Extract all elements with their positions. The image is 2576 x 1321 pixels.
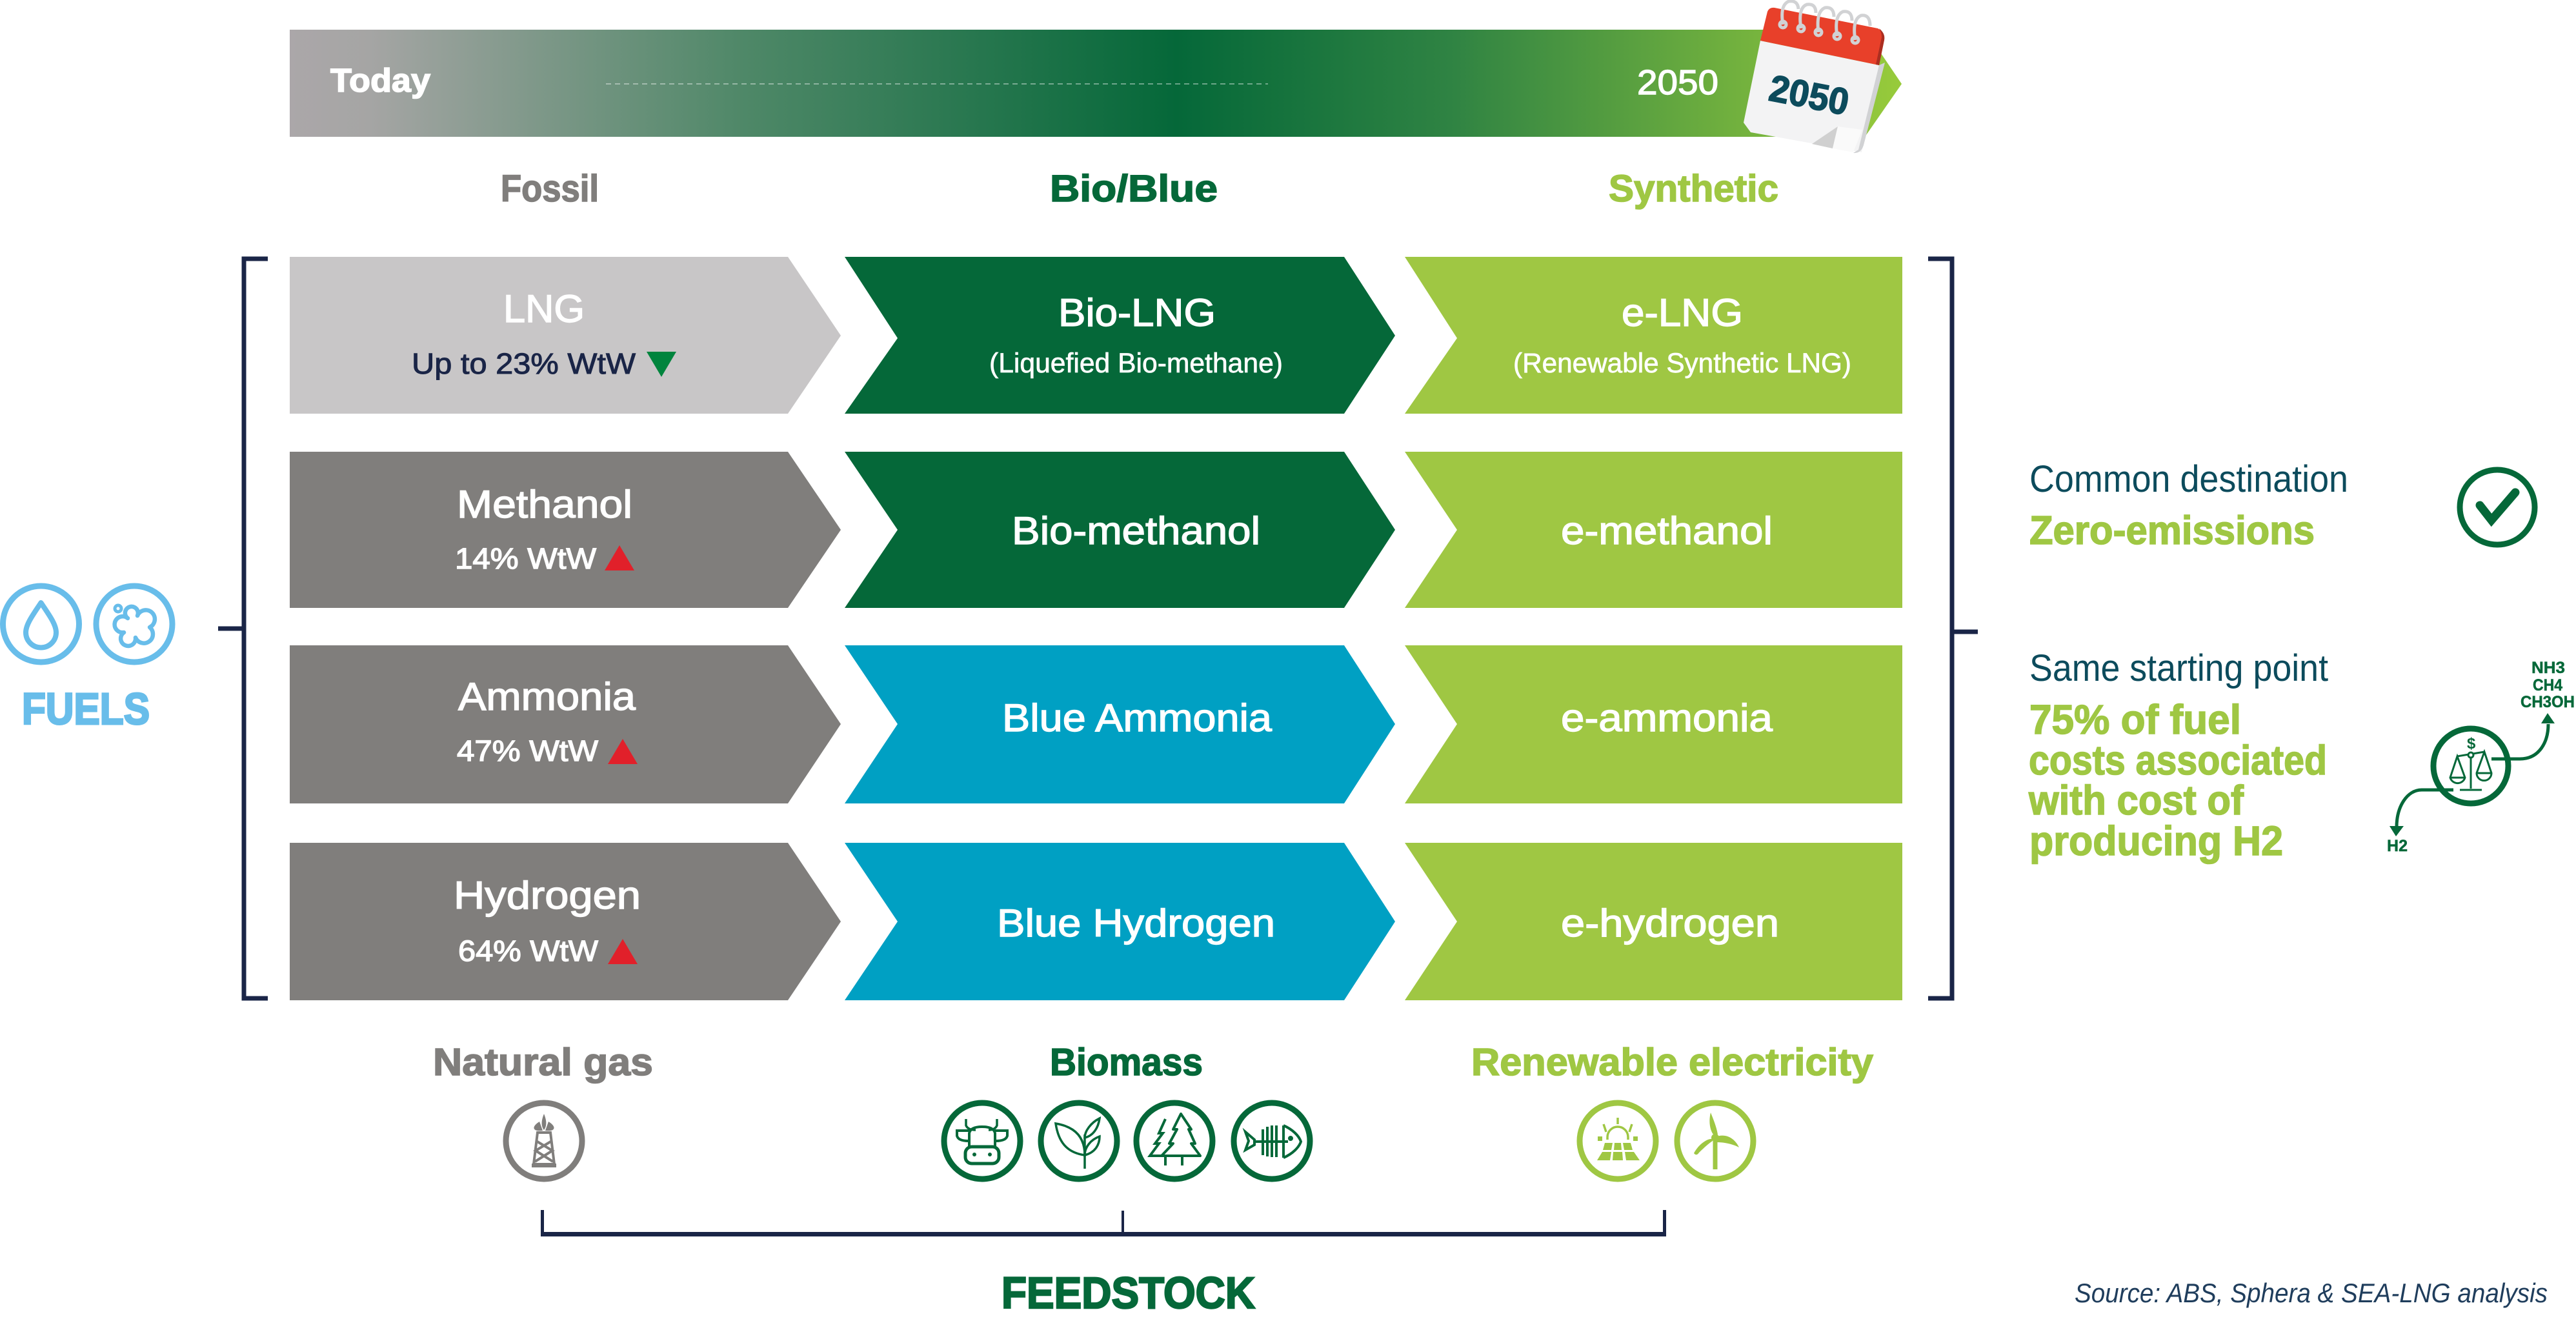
chevron: LNG: Up to 23% WtW [412,347,636,380]
bracket: feedstock [541,1210,1666,1235]
label: feedstock: FEEDSTOCK [1001,1268,1255,1318]
chevron: e-LNG: e-LNG [1622,291,1743,334]
heading: natural gas: Natural gas [433,1041,653,1084]
label: today: Today [330,62,431,99]
text: common destination: Common destination [2029,458,2348,500]
text: zero-emissions: Zero-emissions [2029,509,2315,553]
heading: fossil: Fossil [501,168,599,210]
chevron: e-ammonia: e-ammonia [1561,696,1773,740]
chevron: Hydrogen: 64% WtW [458,934,599,967]
chevron: e-methanol: e-methanol [1561,509,1773,552]
chevron: Methanol [290,452,841,608]
source note: Source: ABS, Sphera & SEA-LNG analysis [2075,1278,2548,1308]
heading: bio/blue: Bio/Blue [1050,168,1218,210]
label: output fuels: CH3OH [2521,693,2575,711]
chevron: Methanol: Methanol [457,483,632,526]
row: Ammonia [290,645,1902,803]
chevron: e-hydrogen [1405,843,1902,1000]
text: 75% of fuel costs: with cost of [2028,777,2244,823]
chevron: e-hydrogen: e-hydrogen [1561,902,1779,945]
icon: plant [1041,1103,1117,1179]
chevron: Blue Hydrogen [845,843,1395,1000]
label: fuels: FUELS [22,684,150,734]
chevron: e-LNG [1405,257,1902,414]
icon: cost scale with arrows: $ [2467,735,2476,752]
icon: cost scale with arrows [2387,659,2575,855]
icon: cow [944,1103,1020,1179]
chevron: Blue Hydrogen: Blue Hydrogen [997,902,1275,945]
chevron: e-LNG: (Renewable Synthetic LNG) [1513,348,1851,379]
text: 75% of fuel costs: 75% of fuel [2029,696,2241,743]
icon: calendar [1744,1,1885,153]
icon: gas cloud [96,586,172,662]
heading: renewable electricity: Renewable electricity [1471,1041,1873,1084]
icon: wind turbine [1677,1103,1753,1179]
label: output fuels: NH3 [2531,659,2565,677]
label: output fuels: CH4 [2533,676,2562,694]
text: common destination [2029,458,2348,553]
icon: gas rig [506,1103,582,1179]
chevron: Bio-methanol: Bio-methanol [1012,509,1260,552]
row: LNG [290,257,1902,414]
chevron: Hydrogen [290,843,841,1000]
chevron: Bio-LNG: (Liquefied Bio-methane) [989,348,1283,379]
heading: synthetic: Synthetic [1609,168,1778,210]
row: Hydrogen [290,843,1902,1000]
chevron: Ammonia [290,645,841,803]
text: same starting point: Same starting point [2029,647,2328,689]
text: 75% of fuel costs [2028,696,2327,864]
chevron: LNG [290,257,841,414]
bracket: fuels left [218,259,268,998]
chevron: Methanol: 14% WtW [455,542,597,575]
chevron: Bio-LNG: Bio-LNG [1058,291,1216,334]
chevron: Hydrogen: Hydrogen [454,874,641,917]
label: output fuels [2387,659,2575,855]
chevron: Ammonia: 47% WtW [457,734,599,767]
chevron: LNG: LNG [503,287,585,330]
icon: fish bone [1234,1103,1310,1179]
chevron: Ammonia: Ammonia [458,675,636,718]
text: same starting point [2028,647,2328,864]
timeline arrow [290,30,1902,137]
chevron: e-ammonia [1405,645,1902,803]
icon: liquid drop [3,586,79,662]
chevron: Bio-LNG [845,257,1395,414]
text: 75% of fuel costs: costs associated [2029,737,2327,783]
chevron: e-methanol [1405,452,1902,608]
row: Methanol [290,452,1902,608]
label: 2050: 2050 [1637,63,1718,102]
chevron: Blue Ammonia: Blue Ammonia [1002,696,1273,740]
icon: trees [1136,1103,1213,1179]
text: 75% of fuel costs: producing H2 [2029,818,2283,864]
icon: check mark [2460,470,2535,545]
bracket: fuels right [1928,259,1978,998]
label: calendar year: 2050 [1766,67,1853,123]
icon: solar panel [1580,1103,1656,1179]
heading: biomass: Biomass [1050,1041,1203,1084]
label: output fuels: H2 [2387,837,2408,855]
chevron: Blue Ammonia [845,645,1395,803]
chevron: Bio-methanol [845,452,1395,608]
